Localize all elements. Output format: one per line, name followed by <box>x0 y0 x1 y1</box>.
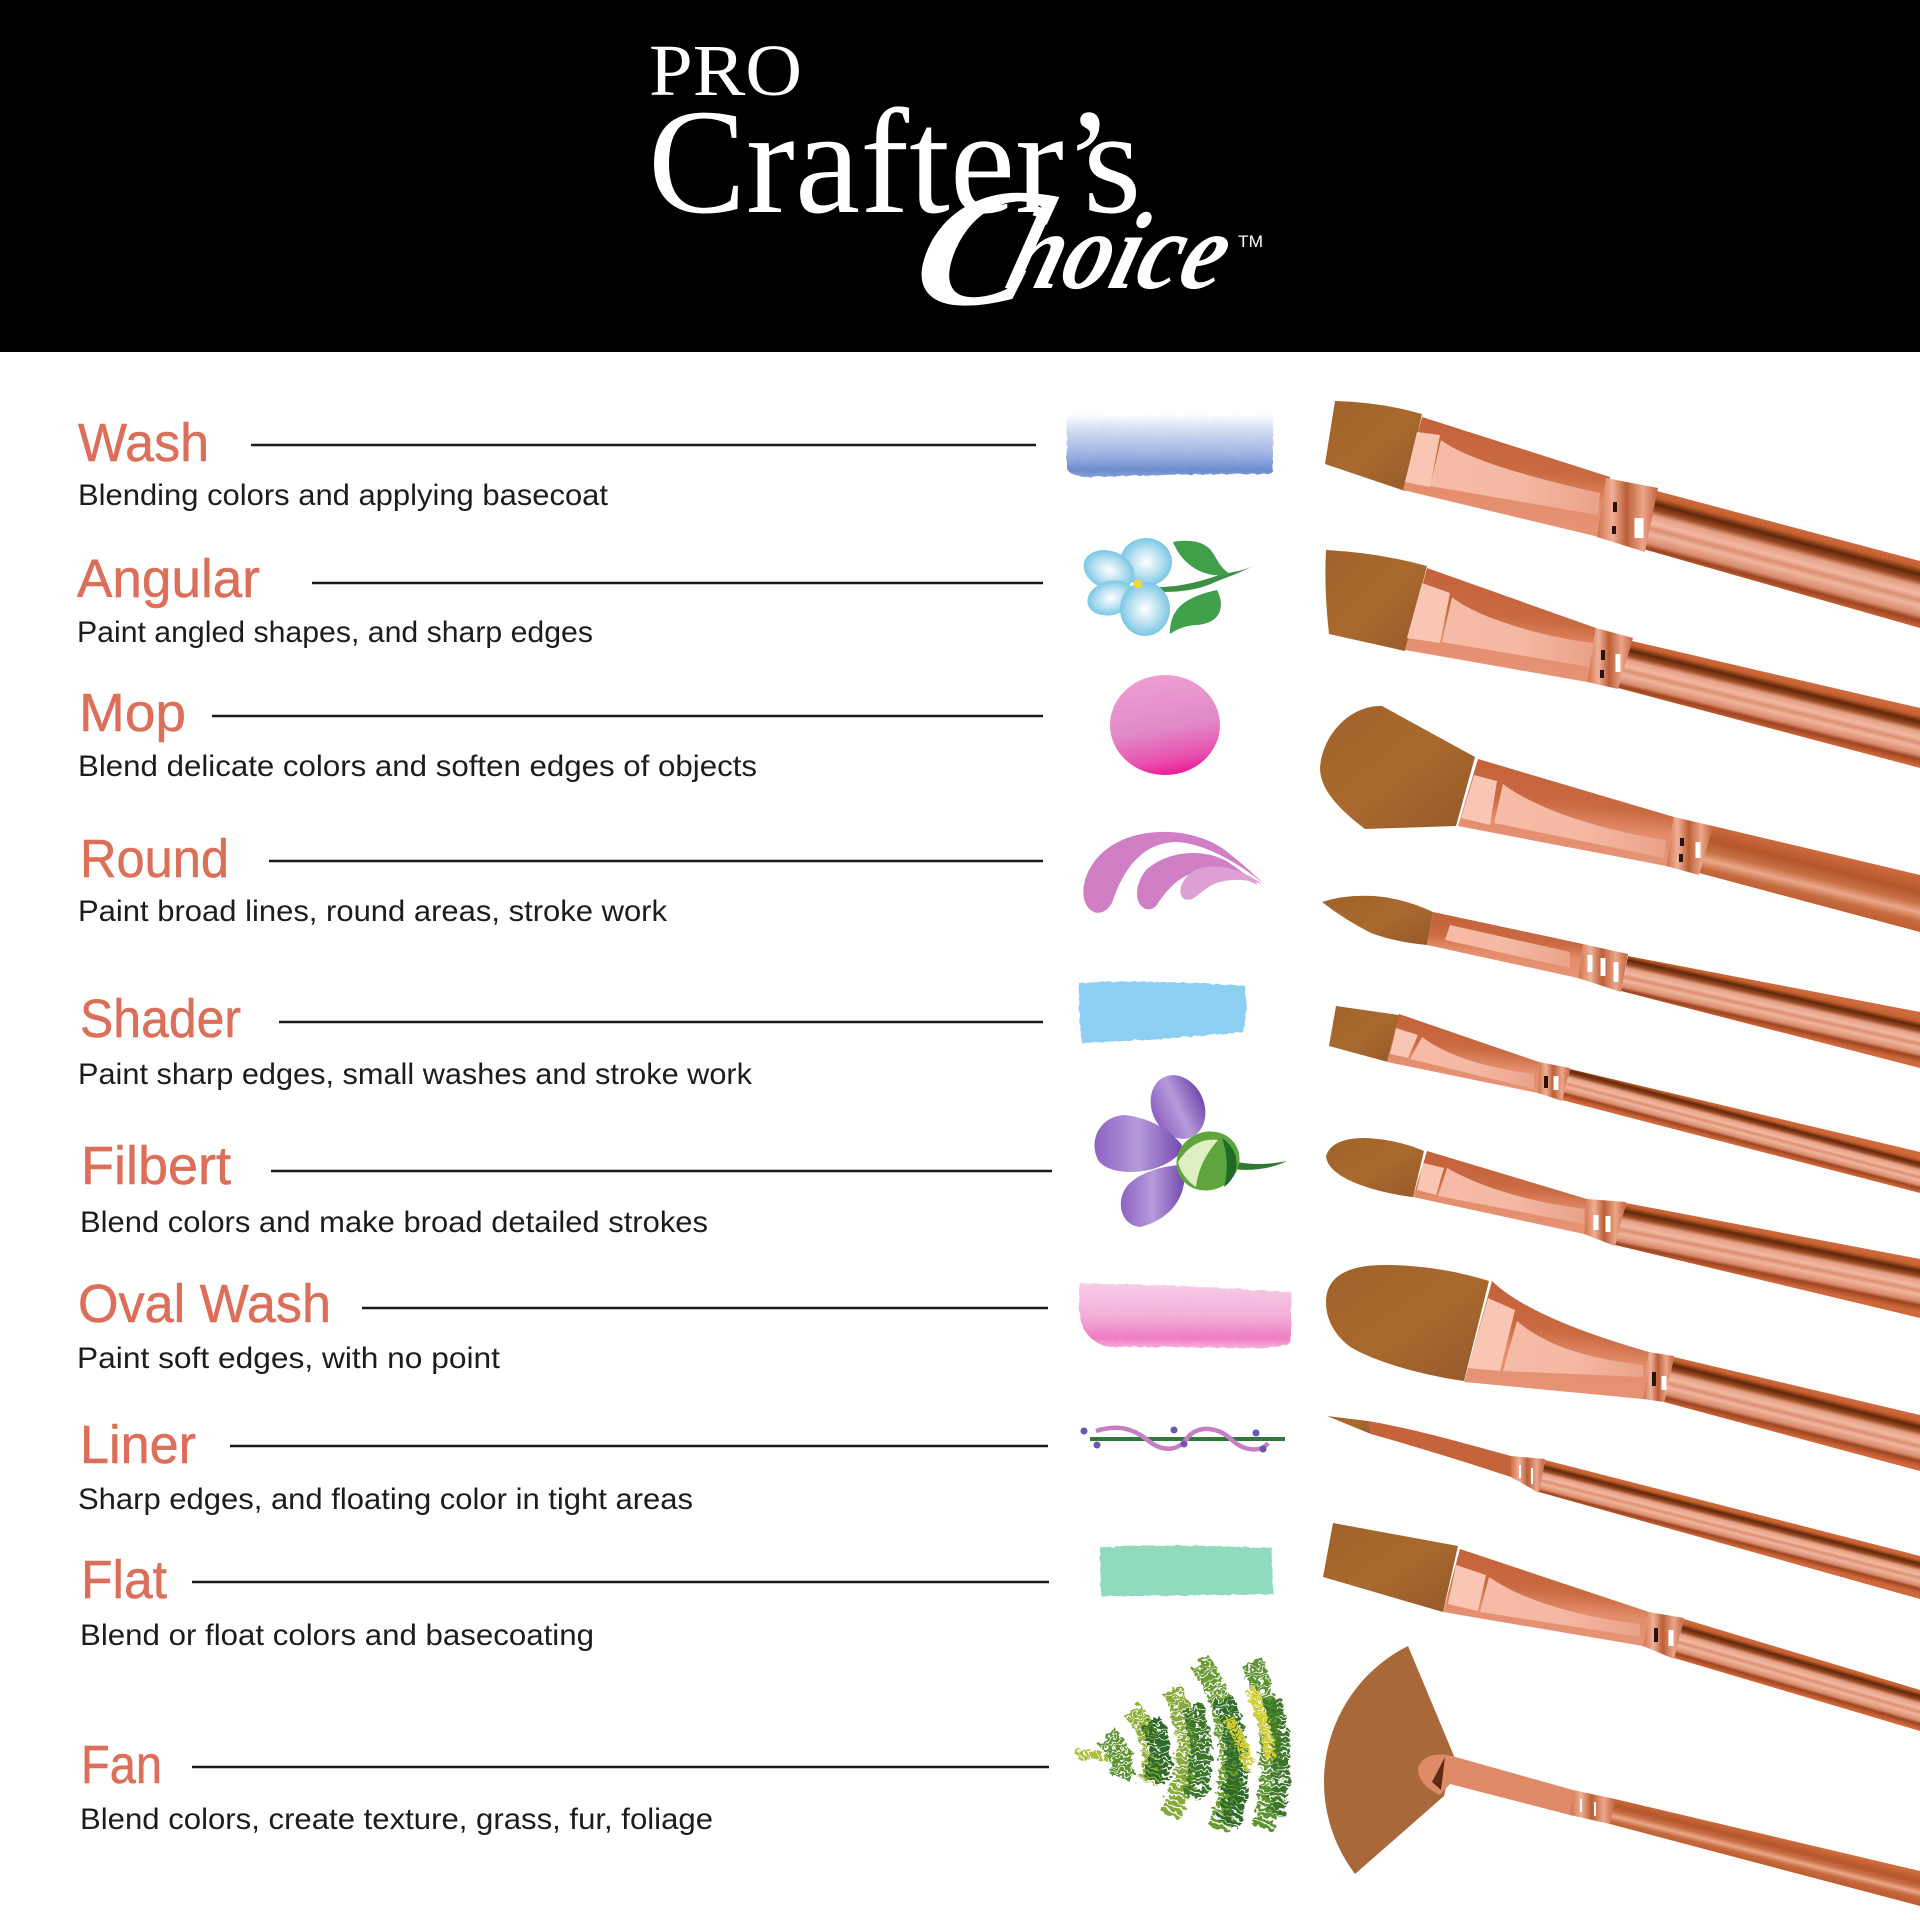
ferrule <box>1387 1014 1539 1093</box>
ferrule highlight <box>1430 440 1600 515</box>
heading: Mop: Mop <box>79 683 186 743</box>
row: Fan <box>80 1735 1049 1836</box>
heading: Liner: Liner <box>80 1415 196 1475</box>
swatch: shader blue stroke <box>1079 982 1247 1043</box>
description: Oval Wash: Paint soft edges, with no point <box>77 1342 501 1375</box>
ferrule highlight <box>1438 1168 1584 1224</box>
brush: mop <box>1320 706 1920 932</box>
swatch: pink mop dab <box>1110 675 1220 775</box>
collar <box>1511 1456 1545 1493</box>
handle <box>1643 491 1920 628</box>
bristles <box>1325 550 1427 651</box>
ferrule end highlight <box>1461 775 1497 825</box>
row: Liner <box>78 1415 1048 1516</box>
brush: wash <box>1325 401 1920 628</box>
row: Wash <box>78 413 1036 512</box>
logo word: Crafter's: s <box>1083 79 1141 245</box>
description: Wash: Blending colors and applying basecoat <box>78 479 609 512</box>
row: Shader <box>78 989 1043 1091</box>
ferrule end highlight <box>1468 1298 1515 1371</box>
handle <box>1615 1203 1920 1318</box>
logo word: Choice, lowercase: hoice <box>996 191 1246 313</box>
description: Shader: Paint sharp edges, small washes and stroke work <box>78 1058 753 1091</box>
ferrule highlight <box>1410 1037 1534 1089</box>
description: Mop: Blend delicate colors and soften edges of objects <box>78 750 757 783</box>
green line <box>1090 1437 1285 1441</box>
purple wave <box>1096 1428 1268 1449</box>
ferrule end highlight <box>1417 1163 1444 1195</box>
ferrule highlight <box>1480 1577 1640 1637</box>
description: Angular: Paint angled shapes, and sharp edges <box>77 616 593 649</box>
bristles <box>1329 1006 1399 1062</box>
row: Angular <box>77 549 1043 649</box>
handle <box>1699 826 1920 932</box>
collar <box>1643 1352 1674 1402</box>
logo word: Crafter's: ’ <box>1064 79 1114 245</box>
collar <box>1643 1612 1684 1659</box>
heading: Round: Round <box>80 829 229 889</box>
collar <box>1578 944 1628 992</box>
ferrule <box>1464 1281 1649 1399</box>
swatch: flat green stroke <box>1100 1546 1273 1596</box>
description: Fan: Blend colors, create texture, grass, fur, foliage <box>80 1803 713 1836</box>
swatch: round comma strokes <box>1083 832 1264 913</box>
dots <box>1080 1426 1266 1452</box>
collar <box>1597 478 1658 552</box>
heading: Oval Wash: Oval Wash <box>78 1274 331 1334</box>
heading: Fan: Fan <box>81 1735 162 1795</box>
ferrule notch <box>1432 1757 1445 1790</box>
logo word: Choice, capital: C <box>894 155 1072 341</box>
brush: flat <box>1323 1523 1920 1731</box>
row: Filbert <box>80 1136 1052 1239</box>
handle <box>1621 956 1920 1068</box>
description: Liner: Sharp edges, and floating color in tight areas <box>78 1483 693 1516</box>
brush: oval wash <box>1326 1265 1920 1471</box>
ferrule highlight <box>1442 597 1593 667</box>
description: Filbert: Blend colors and make broad detailed strokes <box>80 1206 708 1239</box>
bristles <box>1322 896 1433 945</box>
ferrule <box>1368 1421 1511 1477</box>
brush: angular <box>1325 550 1920 768</box>
header band <box>0 0 1920 352</box>
ferrule highlight <box>1445 925 1570 968</box>
heading: Wash: Wash <box>78 413 209 473</box>
icon: violet flower <box>1094 1066 1287 1227</box>
ferrule <box>1458 759 1674 866</box>
bristles <box>1324 1646 1454 1874</box>
ferrule highlight <box>1494 784 1666 858</box>
petal left <box>1094 1115 1182 1172</box>
heading: Shader: Shader <box>80 989 241 1049</box>
ferrule <box>1405 568 1596 682</box>
row: Mop <box>78 683 1043 783</box>
bristles <box>1325 401 1422 491</box>
row: Oval Wash <box>77 1274 1048 1375</box>
ferrule <box>1413 1151 1587 1234</box>
description: Flat: Blend or float colors and basecoating <box>80 1619 594 1652</box>
ferrule end highlight <box>1405 432 1440 487</box>
petal bottom <box>1121 1165 1184 1227</box>
icon: blue flower with leaves <box>1078 538 1253 636</box>
stem <box>1215 1156 1287 1170</box>
flower centre <box>1134 580 1142 588</box>
heading: Flat: Flat <box>81 1550 167 1610</box>
brush: liner <box>1327 1416 1920 1599</box>
leaf bottom <box>1170 590 1221 634</box>
logo word: Crafter's: Crafter <box>648 79 1064 245</box>
handle <box>1610 1799 1920 1906</box>
brush: round <box>1322 896 1920 1068</box>
handle <box>1618 641 1920 768</box>
logo: PRO Crafter's Choice <box>648 30 1263 341</box>
bristles <box>1327 1416 1371 1434</box>
collar <box>1538 1062 1570 1101</box>
flower stem <box>1142 566 1253 592</box>
bristles <box>1323 1523 1458 1612</box>
row: Flat <box>80 1550 1049 1652</box>
handle <box>1664 1357 1920 1471</box>
leaf top <box>1173 541 1230 575</box>
brush: fan <box>1324 1646 1920 1906</box>
ferrule <box>1403 417 1610 538</box>
row: Round <box>78 829 1043 928</box>
collar <box>1570 1790 1615 1824</box>
petal top <box>1140 1066 1216 1148</box>
heading: Filbert: Filbert <box>81 1136 231 1196</box>
brush: shader <box>1329 1006 1920 1193</box>
logo word: PRO: PRO <box>649 30 802 111</box>
handle <box>1539 1460 1920 1599</box>
ferrule highlight <box>1503 1321 1643 1377</box>
ferrule end highlight <box>1390 1028 1418 1058</box>
swatch: oval wash pink stroke <box>1079 1283 1291 1348</box>
ferrule <box>1418 1754 1573 1815</box>
petals <box>1120 538 1172 586</box>
bristles <box>1326 1138 1424 1197</box>
ferrule <box>1443 1549 1649 1646</box>
collar <box>1584 1199 1626 1246</box>
ferrule <box>1427 912 1583 978</box>
icon: liner vine <box>1080 1426 1285 1452</box>
ferrule end highlight <box>1448 1565 1486 1611</box>
bristles <box>1320 706 1475 829</box>
handle <box>1674 1619 1920 1731</box>
bristles <box>1326 1265 1489 1381</box>
collar <box>1587 628 1633 689</box>
icon: foliage tree <box>1076 1662 1281 1830</box>
ferrule end highlight <box>1407 583 1450 643</box>
logo trademark: TM <box>1238 232 1263 251</box>
handle <box>1562 1069 1920 1193</box>
description: Round: Paint broad lines, round areas, stroke work <box>78 895 668 928</box>
collar <box>1666 817 1713 875</box>
calyx <box>1167 1121 1249 1201</box>
brush: filbert <box>1326 1138 1920 1318</box>
swatch: wash stroke <box>1067 414 1273 477</box>
heading: Angular: Angular <box>77 549 260 609</box>
